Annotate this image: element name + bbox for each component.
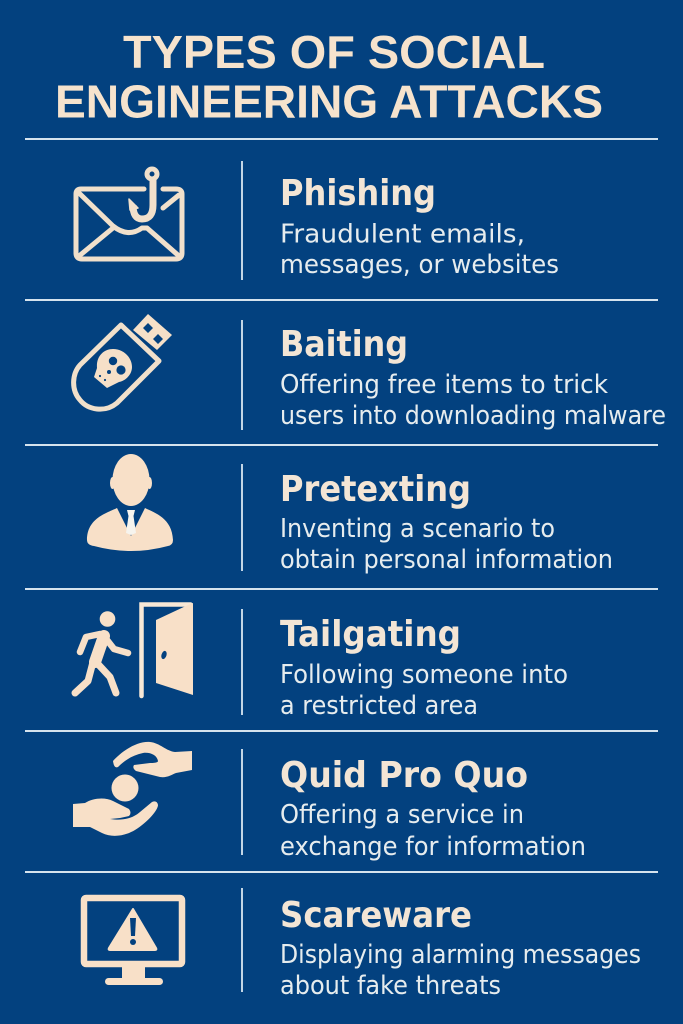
heading: Quid Pro Quo: Quid Pro Quo — [280, 755, 528, 796]
heading: Tailgating: Tailgating — [280, 614, 461, 655]
description: Phishing: Fraudulent emails, — [280, 220, 525, 250]
description: Baiting — [280, 370, 666, 431]
description: Baiting: Offering free items to trick — [280, 370, 608, 400]
description: Quid Pro Quo: Offering a service in — [280, 800, 524, 830]
panel: quid pro quo — [73, 742, 586, 862]
description: Phishing: messages, or websites — [280, 250, 559, 280]
icon: USB drive with skull — [74, 314, 172, 409]
panel: scareware — [84, 895, 641, 1001]
panel: baiting — [74, 314, 666, 431]
description: Scareware: Displaying alarming messages — [280, 940, 641, 970]
title: TYPES OF SOCIAL — [123, 26, 545, 78]
heading: Baiting: Baiting — [280, 324, 408, 365]
panel: phishing — [76, 169, 559, 280]
description: Tailgating — [280, 660, 568, 721]
icon: hands exchanging a coin — [73, 742, 192, 836]
description: Pretexting: Inventing a scenario to — [280, 514, 555, 544]
description: Quid Pro Quo: exchange for information — [280, 832, 586, 862]
description: Scareware: about fake threats — [280, 971, 501, 1001]
icon: person walking through a door — [75, 603, 193, 696]
icon: person in suit — [87, 454, 173, 551]
title: ENGINEERING ATTACKS — [55, 76, 603, 128]
heading: Pretexting: Pretexting — [280, 469, 471, 510]
icon: monitor with warning triangle — [84, 898, 182, 985]
title — [55, 26, 603, 128]
heading: Phishing: Phishing — [280, 173, 436, 214]
description: Scareware — [280, 940, 641, 1001]
description: Pretexting: obtain personal information — [280, 545, 613, 575]
description: Pretexting — [280, 514, 613, 575]
icon: envelope with fishing hook — [76, 169, 182, 259]
description: Tailgating: Following someone into — [280, 660, 568, 690]
heading: Scareware: Scareware — [280, 895, 472, 936]
panel: tailgating — [75, 603, 568, 721]
panel: pretexting — [87, 454, 613, 575]
description: Tailgating: a restricted area — [280, 691, 478, 721]
description: Quid Pro Quo — [280, 800, 586, 862]
description: Phishing — [280, 220, 559, 280]
